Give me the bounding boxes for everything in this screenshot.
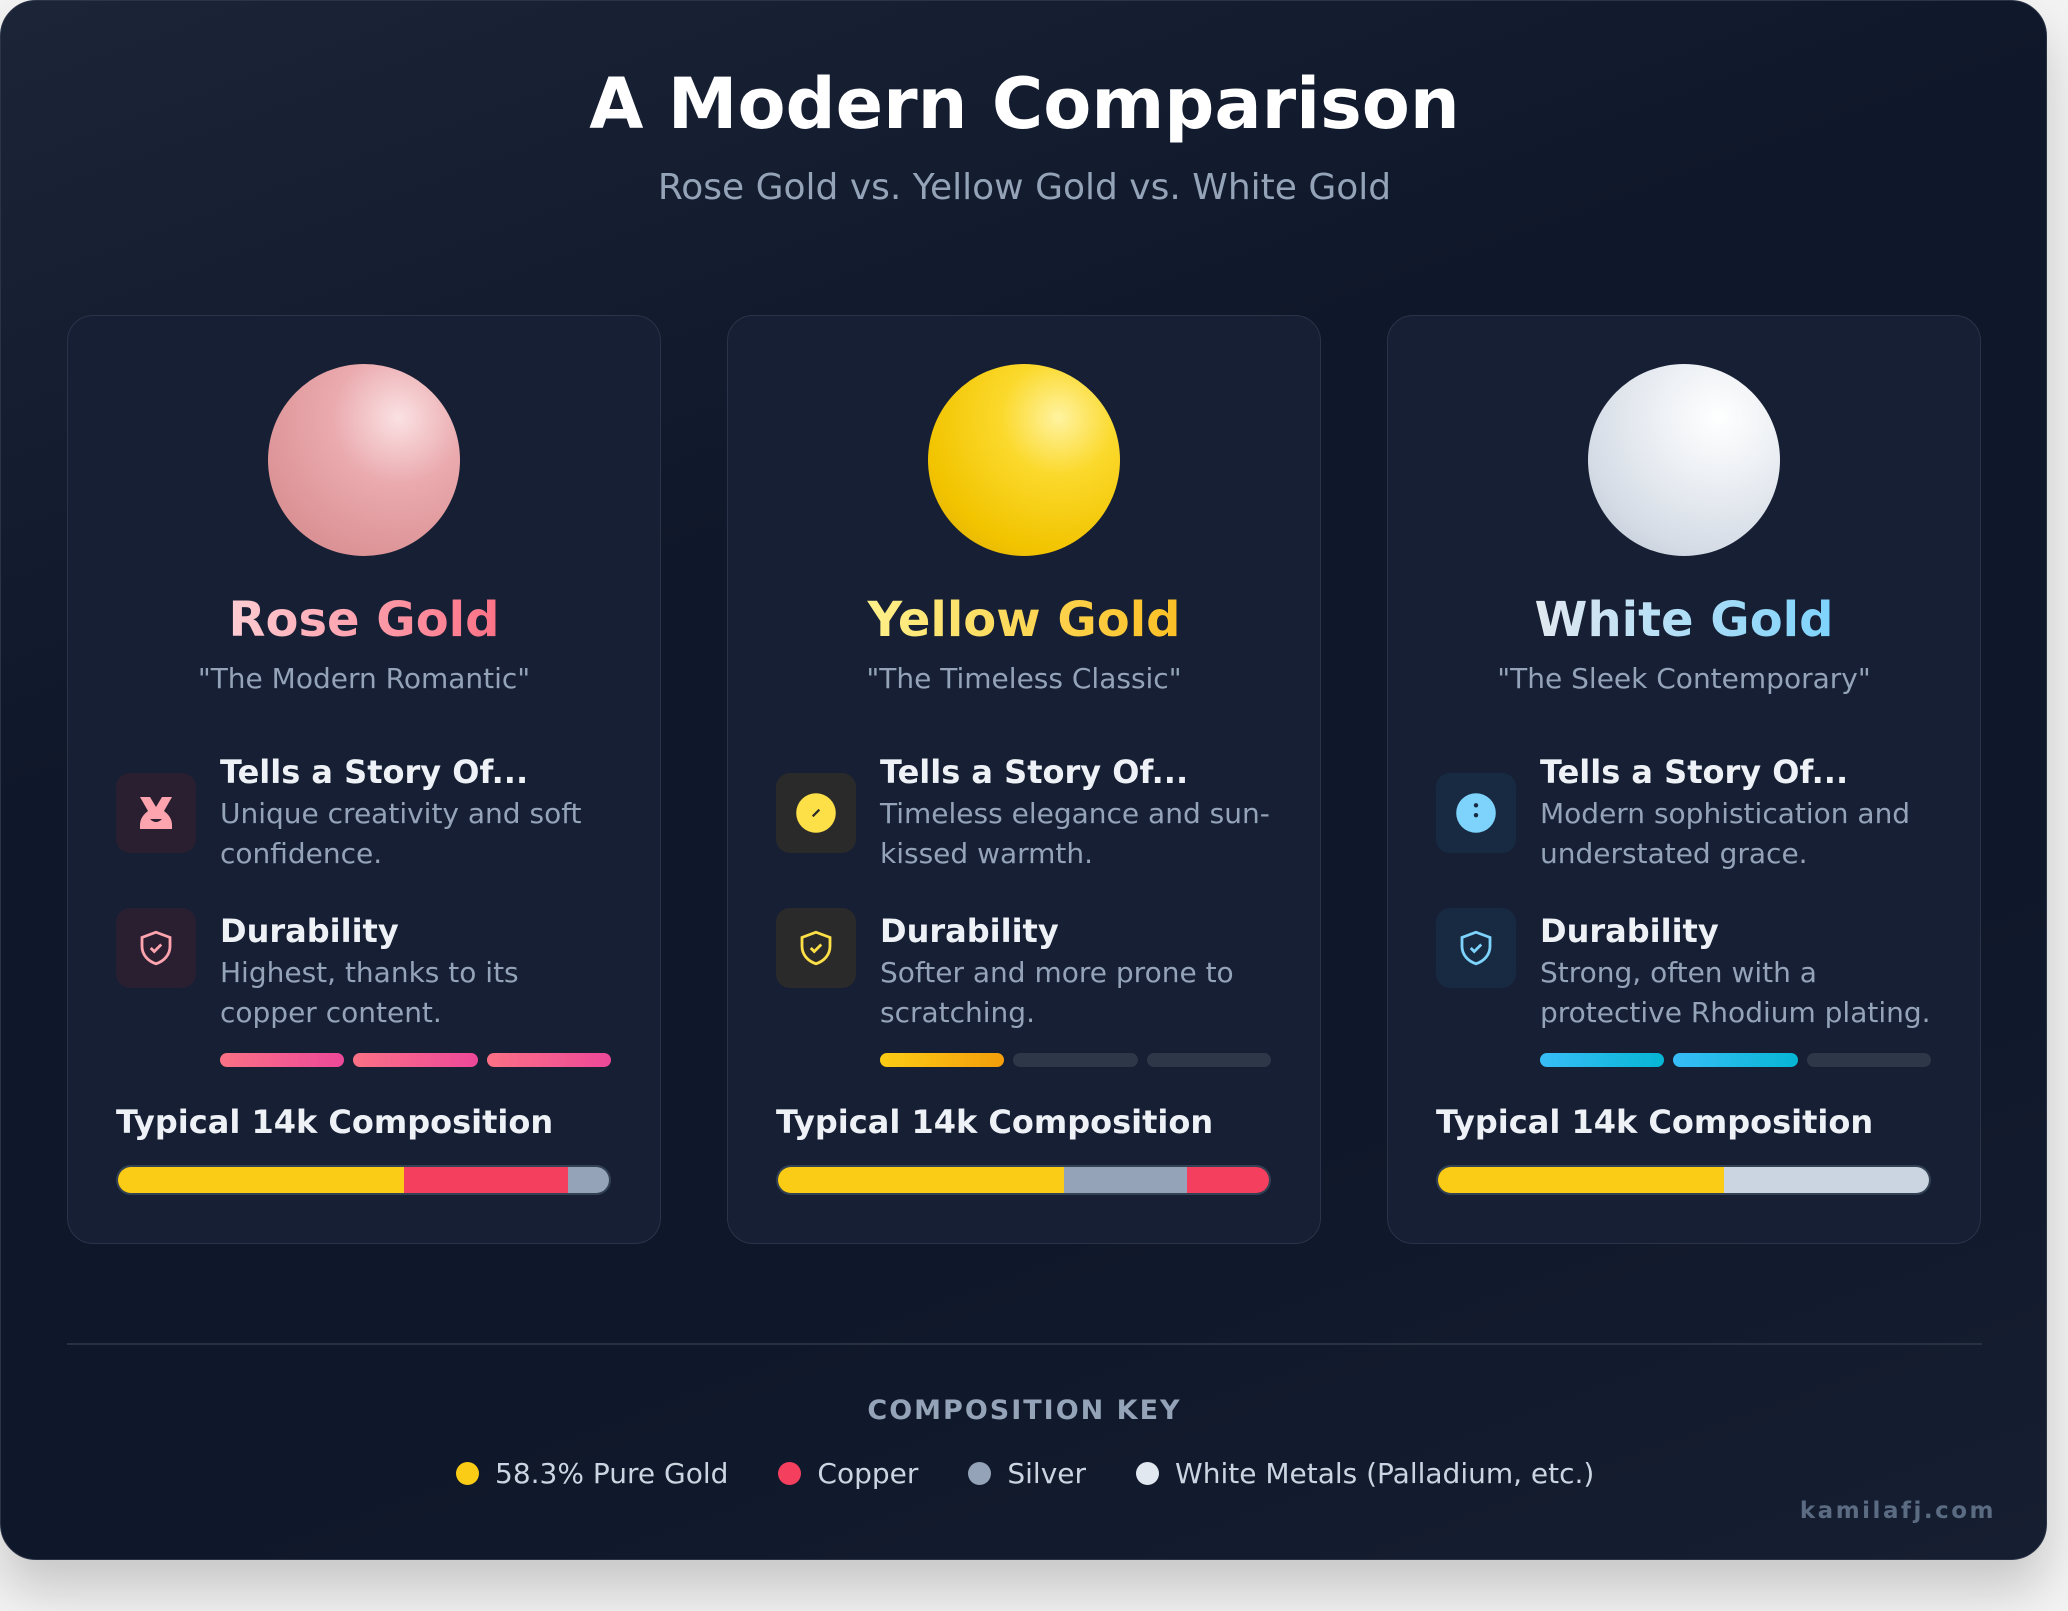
icon: story <box>116 773 196 853</box>
text: durability: Highest, thanks to its copper content. <box>220 956 519 1029</box>
quote: "The Sleek Contemporary" <box>1497 662 1871 695</box>
heading: rose gold: Rose Gold <box>229 592 499 648</box>
icon: white sphere <box>1588 364 1780 556</box>
panel: white gold <box>1387 315 1981 1244</box>
icon: shield <box>1436 908 1516 988</box>
legend: Copper <box>817 1457 918 1490</box>
quote: "The Modern Romantic" <box>198 662 530 695</box>
heading: composition: Typical 14k Composition <box>776 1103 1213 1141</box>
composition bar <box>776 1165 1271 1195</box>
composition bar <box>1436 1165 1931 1195</box>
subtitle: Rose Gold vs. Yellow Gold vs. White Gold <box>658 167 1391 208</box>
durability bars <box>220 1053 611 1067</box>
icon: rose sphere <box>268 364 460 556</box>
text: durability: Strong, often with a protective Rhodium plating. <box>1540 956 1931 1029</box>
heading: durability: Durability <box>220 912 399 950</box>
text: story: Timeless elegance and sun-kissed warmth. <box>880 797 1270 870</box>
text: durability: Softer and more prone to scratching. <box>880 956 1234 1029</box>
heading: composition: Typical 14k Composition <box>116 1103 553 1141</box>
quote: "The Timeless Classic" <box>866 662 1182 695</box>
legend <box>456 1457 1594 1490</box>
heading: story: Tells a Story Of... <box>220 753 528 791</box>
title: A Modern Comparison <box>589 63 1460 145</box>
durability bars <box>1540 1053 1931 1067</box>
legend: Silver <box>1007 1457 1086 1490</box>
heading: durability: Durability <box>1540 912 1719 950</box>
icon: shield <box>116 908 196 988</box>
heading: white gold: White Gold <box>1535 592 1833 648</box>
icon: story <box>776 773 856 853</box>
legend: White Metals (Palladium, etc.) <box>1175 1457 1594 1490</box>
heading: yellow gold: Yellow Gold <box>867 592 1181 648</box>
icon: shield <box>776 908 856 988</box>
legend: 58.3% Pure Gold <box>495 1457 728 1490</box>
icon: story <box>1436 773 1516 853</box>
heading: story: Tells a Story Of... <box>880 753 1188 791</box>
composition bar <box>116 1165 611 1195</box>
text: story: Unique creativity and soft confidence. <box>220 797 582 870</box>
heading: composition key: COMPOSITION KEY <box>867 1395 1182 1426</box>
panel: yellow gold <box>727 315 1321 1244</box>
durability bars <box>880 1053 1271 1067</box>
panel: rose gold <box>67 315 661 1244</box>
icon: yellow sphere <box>928 364 1120 556</box>
heading: composition: Typical 14k Composition <box>1436 1103 1873 1141</box>
heading: durability: Durability <box>880 912 1059 950</box>
text: story: Modern sophistication and understated grace. <box>1540 797 1910 870</box>
heading: story: Tells a Story Of... <box>1540 753 1848 791</box>
watermark: kamilafj.com <box>1800 1498 1996 1524</box>
